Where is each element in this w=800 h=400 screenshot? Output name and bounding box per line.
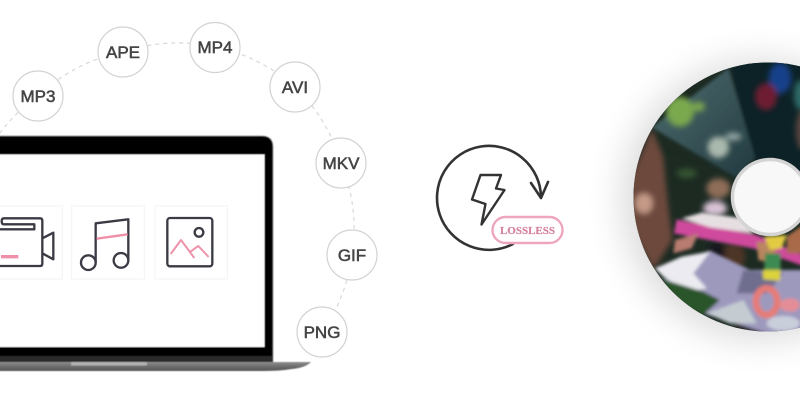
icon tile: image — [155, 206, 227, 279]
photo — [634, 62, 800, 332]
format badge: APE — [98, 27, 148, 77]
icon tile: music — [72, 206, 144, 279]
icon tile: video — [0, 206, 62, 279]
format badge: GIF: GIF — [338, 246, 366, 265]
laptop screen — [0, 154, 264, 347]
laptop frame — [0, 136, 273, 362]
disc shadow — [622, 60, 800, 340]
icon: video camera — [0, 218, 53, 266]
icon: music note — [81, 219, 128, 270]
circular arrow — [437, 146, 548, 250]
lossless label: LOSSLESS — [500, 225, 555, 237]
format badge: MP4: MP4 — [198, 38, 232, 57]
laptop lower bezel — [0, 356, 272, 362]
dashed format orbit — [0, 43, 354, 332]
laptop base — [0, 362, 311, 371]
format badge: AVI — [270, 62, 320, 112]
format badge: APE: APE — [106, 43, 140, 62]
format badge: PNG: PNG — [304, 323, 340, 342]
format badge: MKV: MKV — [323, 154, 360, 173]
icon: picture — [167, 218, 212, 266]
screen icons — [0, 206, 227, 279]
format badge: MP3: MP3 — [21, 87, 55, 106]
lossless pill — [492, 217, 562, 243]
format badge: AVI: AVI — [282, 78, 308, 97]
disc centre hole — [732, 160, 800, 234]
lightning bolt — [472, 175, 504, 224]
format badge: MP4 — [190, 22, 240, 72]
disc with blurred party photo — [634, 62, 800, 332]
format badge: MP3 — [13, 71, 63, 121]
format badge: GIF — [327, 230, 377, 280]
lossless conversion icon — [437, 146, 562, 250]
laptop — [0, 136, 311, 371]
format badge: PNG — [297, 307, 347, 357]
format badge: MKV — [316, 138, 366, 188]
laptop notch — [71, 362, 147, 366]
